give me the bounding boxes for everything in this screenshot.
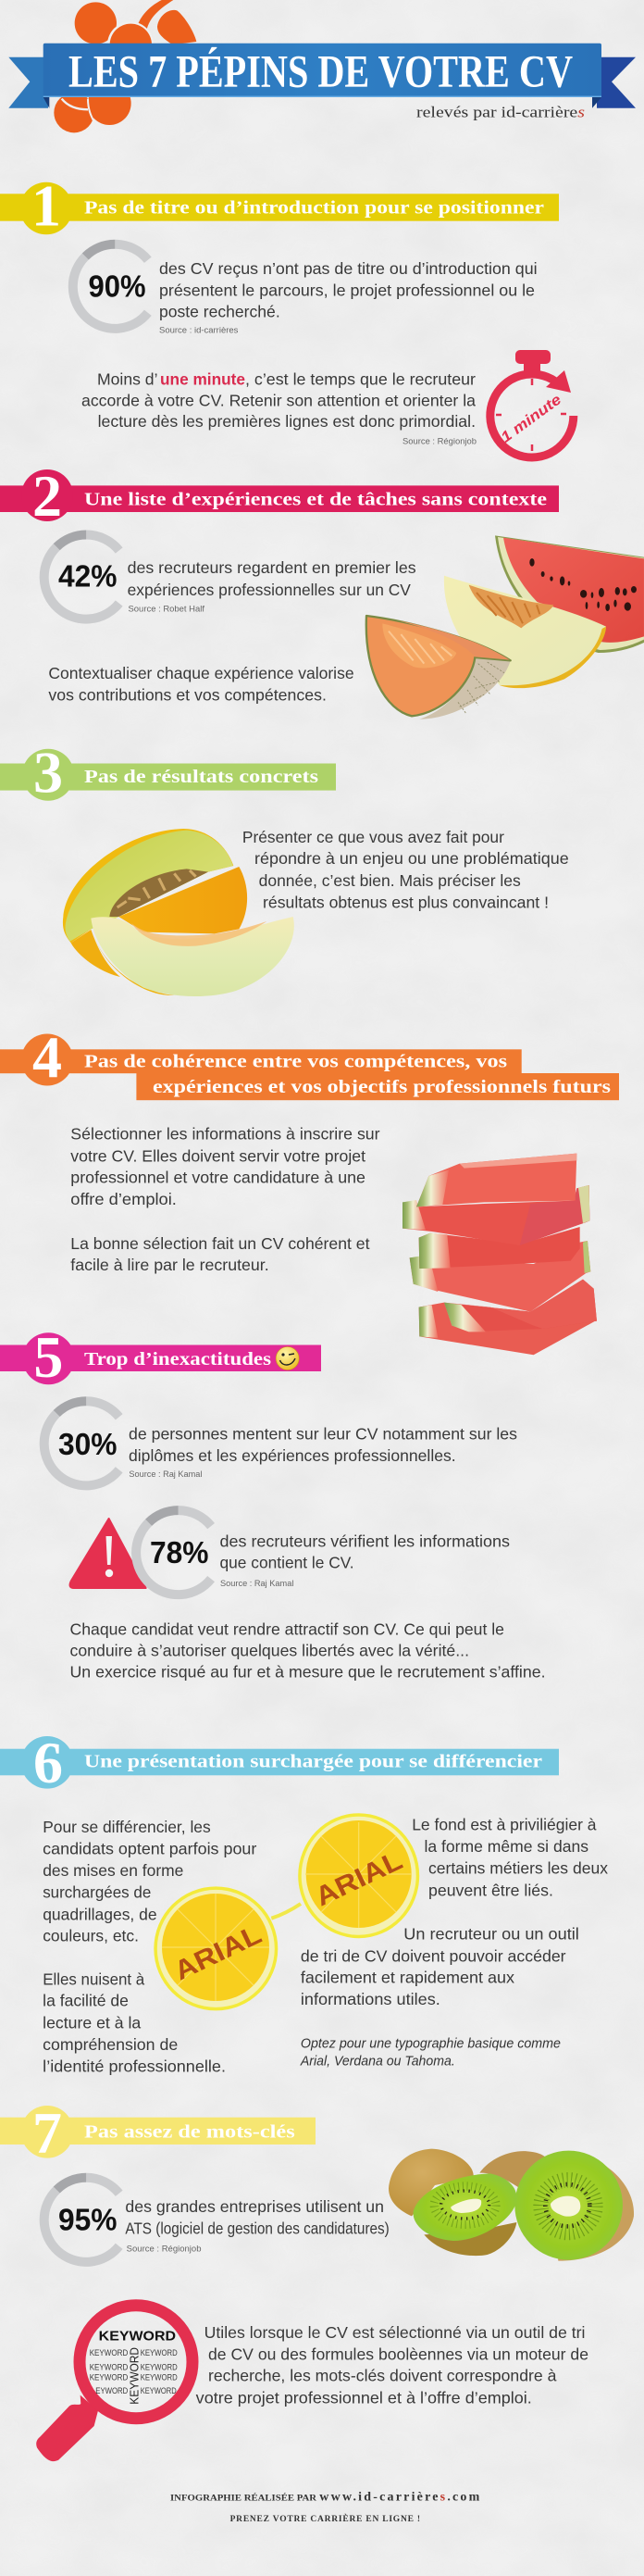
text: selection: professionnel et votre candidature à une: [70, 1169, 365, 1187]
stat ring 78%: 78%: [150, 1535, 209, 1569]
section 6: [0, 1730, 608, 2076]
text: 30% stat: [129, 1424, 517, 1479]
text: selection: votre CV. Elles doivent servir votre projet: [70, 1146, 365, 1165]
footer: www.id-carrières.com: [319, 2491, 480, 2505]
text: results: répondre à un enjeu ou une problématique: [254, 849, 569, 868]
image: kiwis: [389, 2149, 634, 2261]
icon: magnifier with keywords: KEYWORD: [141, 2373, 178, 2382]
text: candidate paragraph: Un exercice risqué au fur et à mesure que le recrutement s’affine.: [70, 1663, 546, 1682]
text: left column: compréhension de: [43, 2035, 178, 2054]
text: 95% stat: Source : Régionjob: [127, 2245, 202, 2254]
heading 2: [0, 463, 559, 529]
stat ring 42%: [44, 535, 119, 619]
text: left column: lecture et à la: [43, 2014, 141, 2032]
text: left column: [43, 1818, 257, 2076]
image: watermelon stack: [402, 1154, 597, 1355]
text: 90% stat: [159, 259, 538, 334]
text: left column: l’identité professionnelle.: [43, 2057, 226, 2076]
icon: smiley: [276, 1346, 299, 1370]
stat ring 30%: 30%: [58, 1427, 117, 1461]
section 1: [0, 172, 574, 457]
stat ring 95%: 95%: [58, 2202, 117, 2236]
image: arial lemons: [154, 1813, 419, 2010]
text: 42% stat: expériences professionnelles sur un CV: [128, 581, 411, 599]
stat ring 95%: [44, 2178, 119, 2262]
section 2: [0, 463, 644, 719]
watermelon wedge: [495, 535, 644, 653]
text: 30% stat: Source : Raj Kamal: [129, 1469, 202, 1479]
text: right column: peuvent être liés.: [428, 1881, 553, 1899]
heading 7: 7: [32, 2100, 62, 2166]
text: left column: surchargées de: [43, 1883, 151, 1902]
text: results: Présenter ce que vous avez fait pour: [242, 828, 504, 846]
text: left column: la facilité de: [43, 1992, 129, 2010]
text: contextualiser: Contextualiser chaque expérience valorise: [48, 664, 354, 682]
heading 4: 4: [32, 1024, 62, 1090]
icon: stopwatch: 1 minute: [499, 392, 564, 446]
section 4: [0, 1024, 619, 1355]
text: 90% stat: présentent le parcours, le projet professionnel ou le: [159, 281, 535, 299]
icon: stopwatch: [490, 350, 574, 457]
heading 6: [0, 1730, 559, 1795]
text: left column: candidats optent parfois pour: [43, 1840, 257, 1858]
text: candidate paragraph: conduire à s’autoriser quelques libertés avec la vérité...: [70, 1642, 469, 1660]
heading 2: 2: [32, 463, 62, 529]
subtitle: relevés par id-carrière s: [416, 104, 585, 121]
text: 90% stat: des CV reçus n’ont pas de titre ou d’introduction qui: [159, 259, 538, 278]
image: yellow melon: [63, 829, 294, 996]
heading 4: expériences et vos objectifs professionnels futurs: [153, 1077, 611, 1097]
text: one minute: accorde à votre CV. Retenir son attention et orienter la: [81, 391, 476, 409]
stat ring 42%: 42%: [58, 559, 117, 593]
text: left column: des mises en forme: [43, 1861, 183, 1880]
icon: magnifier with keywords: KEYWORD: [141, 2386, 177, 2395]
text: 42% stat: des recruteurs regardent en premier les: [128, 558, 416, 577]
image: arial lemons: ARIAL: [311, 1845, 407, 1912]
text: one minute: une minute: [160, 370, 245, 389]
text: 78% stat: des recruteurs vérifient les informations: [220, 1532, 510, 1550]
heading 7: [0, 2100, 316, 2166]
text: typography tip: Arial, Verdana ou Tahoma.: [300, 2055, 455, 2070]
text: left column: Elles nuisent à: [43, 1970, 144, 1988]
icon: magnifier with keywords: KEYWORD: [90, 2362, 129, 2371]
footer: INFOGRAPHIE RÉALISÉE PAR: [170, 2493, 316, 2504]
icon: magnifier with keywords: KEYWORD: [90, 2373, 129, 2382]
text: 95% stat: ATS (logiciel de gestion des candidatures): [125, 2220, 390, 2238]
text: 30% stat: diplômes et les expériences professionnelles.: [129, 1446, 456, 1465]
text: 42% stat: [128, 558, 416, 613]
text: one minute: , c’est le temps que le recruteur: [245, 370, 476, 389]
heading 3: Pas de résultats concrets: [84, 767, 318, 787]
honeydew slice: [444, 576, 606, 688]
text: results: donnée, c’est bien. Mais préciser les: [259, 871, 521, 890]
text: right column: la forme même si dans: [424, 1837, 588, 1856]
text: selection: Sélectionner les informations à inscrire sur: [70, 1125, 380, 1144]
title ribbon: [8, 44, 636, 108]
text: one minute: Moins d’: [97, 370, 157, 389]
heading 5: Trop d’inexactitudes: [84, 1349, 271, 1369]
text: candidate paragraph: [70, 1619, 546, 1682]
section 3: [0, 739, 569, 996]
heading 1: Pas de titre ou d’introduction pour se positionner: [84, 198, 544, 219]
text: keywords paragraph: [196, 2323, 588, 2407]
section 5: [0, 1324, 546, 1682]
heading 1: [0, 172, 559, 239]
stat ring 90%: 90%: [89, 269, 146, 304]
text: contextualiser: vos contributions et vos compétences.: [48, 686, 327, 705]
stat ring 78%: [136, 1510, 211, 1594]
text: keywords paragraph: recherche, les mots-clés doivent correspondre à: [208, 2367, 557, 2385]
text: right column: de tri de CV doivent pouvoir accéder: [301, 1946, 566, 1965]
text: one minute: lecture dès les premières lignes est donc primordial.: [98, 412, 476, 431]
icon: magnifier with keywords: KEYWORD: [141, 2362, 178, 2371]
heading 4: [0, 1024, 619, 1100]
text: right column: Le fond est à priviliégier à: [412, 1816, 597, 1834]
text: right column: Un recruteur ou un outil: [403, 1924, 579, 1943]
text: keywords paragraph: votre projet professionnel et à l’offre d’emploi.: [196, 2389, 532, 2407]
icon: warning triangle: [70, 1519, 146, 1588]
text: typography tip: [300, 2037, 561, 2070]
text: left column: quadrillages, de: [43, 1905, 157, 1923]
text: 90% stat: poste recherché.: [159, 303, 280, 321]
text: selection: La bonne sélection fait un CV cohérent et: [70, 1234, 370, 1253]
footer: [170, 2491, 480, 2524]
text: 78% stat: que contient le CV.: [220, 1554, 354, 1572]
text: keywords paragraph: Utiles lorsque le CV est sélectionné via un outil de tri: [204, 2323, 585, 2342]
decorative orange fruit behind ribbon: [54, 0, 196, 132]
text: 30% stat: de personnes mentent sur leur CV notamment sur les: [129, 1424, 517, 1443]
cantaloupe slice: [366, 616, 511, 719]
stat ring 90%: [73, 244, 148, 329]
image: melon slices: [366, 535, 644, 719]
text: right column: [301, 1816, 608, 2008]
heading 3: [0, 739, 336, 806]
text: results: [242, 828, 569, 912]
text: 78% stat: Source : Raj Kamal: [220, 1579, 293, 1588]
text: results: résultats obtenus est plus convaincant !: [263, 894, 549, 912]
stat ring 30%: [44, 1401, 119, 1485]
text: 95% stat: des grandes entreprises utilisent un: [125, 2197, 384, 2216]
text: selection: offre d’emploi.: [70, 1190, 177, 1208]
text: left column: couleurs, etc.: [43, 1927, 139, 1945]
heading 5: 5: [33, 1324, 63, 1390]
heading 3: 3: [33, 739, 63, 806]
heading 7: Pas assez de mots-clés: [84, 2121, 295, 2142]
icon: magnifier with keywords: KEYWORD: [141, 2348, 178, 2357]
heading 4: Pas de cohérence entre vos compétences, vos: [84, 1052, 507, 1072]
header: [8, 0, 636, 132]
heading 2: Une liste d’expériences et de tâches sans contexte: [84, 489, 547, 509]
heading 5: [0, 1324, 321, 1390]
text: 95% stat: [125, 2197, 390, 2254]
image: arial lemons: ARIAL: [170, 1919, 266, 1986]
text: candidate paragraph: Chaque candidat veut rendre attractif son CV. Ce qui peut le: [70, 1619, 504, 1638]
icon: magnifier with keywords: [36, 2306, 192, 2461]
icon: magnifier with keywords: KEYWORD: [99, 2328, 176, 2344]
text: selection: [70, 1125, 380, 1274]
icon: magnifier with keywords: KEYWORD: [128, 2347, 141, 2405]
text: 42% stat: Source : Robet Half: [128, 604, 205, 613]
text: keywords paragraph: de CV ou des formules boolèennes via un moteur de: [208, 2345, 588, 2363]
heading 6: Une présentation surchargée pour se différencier: [84, 1751, 542, 1771]
text: right column: certains métiers les deux: [428, 1859, 608, 1878]
heading 6: 6: [33, 1730, 63, 1795]
text: typography tip: Optez pour une typographie basique comme: [301, 2037, 561, 2052]
text: right column: facilement et rapidement aux: [301, 1969, 514, 1987]
text: selection: facile à lire par le recruteur.: [70, 1256, 269, 1274]
section 7: [0, 2100, 634, 2461]
footer: PRENEZ VOTRE CARRIÈRE EN LIGNE !: [230, 2513, 420, 2524]
text: one minute: [81, 370, 477, 445]
text: 78% stat: [220, 1532, 510, 1588]
text: contextualiser: [48, 664, 354, 705]
text: left column: Pour se différencier, les: [43, 1818, 211, 1836]
icon: magnifier with keywords: EYWORD: [95, 2386, 129, 2395]
icon: magnifier with keywords: KEYWORD: [90, 2348, 129, 2357]
text: right column: informations utiles.: [301, 1990, 440, 2008]
text: 90% stat: Source : id-carrières: [159, 325, 239, 334]
text: one minute: Source : Régionjob: [402, 436, 477, 445]
heading 1: 1: [31, 172, 61, 239]
